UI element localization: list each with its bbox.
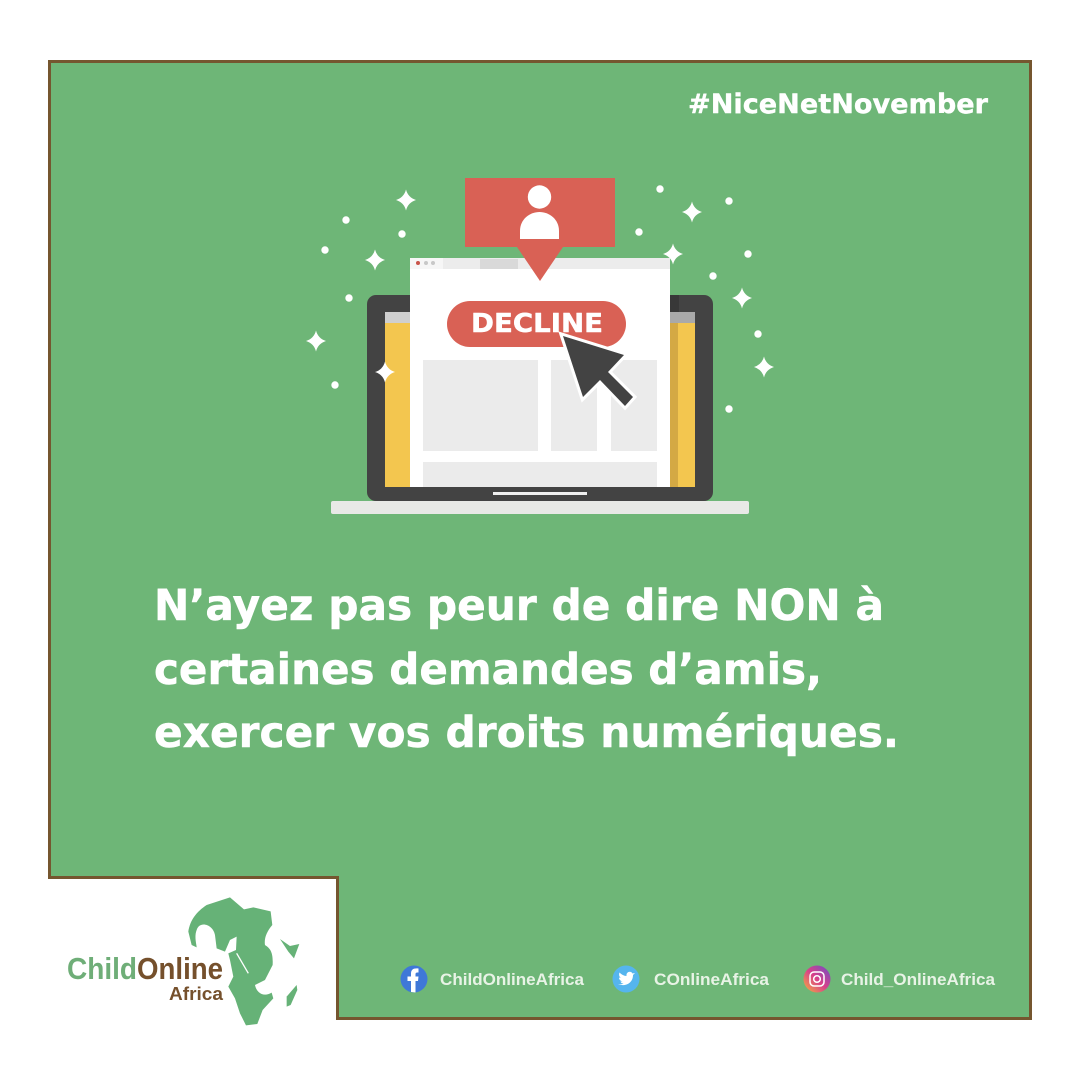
profile notification bubble	[465, 178, 615, 281]
logo: Child Online Africa: Africa	[169, 984, 224, 1004]
twitter handle: COnlineAfrica	[654, 970, 770, 989]
icon: Africa map	[188, 897, 299, 1025]
logo: Child Online Africa: Online	[137, 951, 223, 986]
main message	[154, 581, 899, 758]
browser window	[410, 258, 670, 487]
icon: instagram	[804, 966, 830, 992]
facebook handle: ChildOnlineAfrica	[440, 970, 585, 989]
illustration: laptop with decline popup	[306, 178, 774, 514]
logo: Child Online Africa	[67, 897, 299, 1025]
sparkles and dots	[306, 185, 774, 413]
instagram handle: Child_OnlineAfrica	[841, 970, 996, 989]
sparkles overlapping the screen	[375, 244, 683, 382]
laptop body	[331, 295, 749, 514]
icon: twitter	[612, 966, 640, 992]
main message: certaines demandes d’amis,	[154, 645, 822, 695]
icon: facebook	[400, 966, 428, 992]
wordmark: Child	[67, 951, 137, 986]
social links	[400, 966, 996, 992]
decline button	[447, 301, 626, 347]
main message: N’ayez pas peur de dire NON à	[154, 581, 884, 631]
icon: cursor arrow	[563, 336, 633, 406]
hashtag: #NiceNetNovember	[688, 89, 989, 120]
main message: exercer vos droits numériques.	[154, 708, 899, 758]
decline button: DECLINE	[471, 309, 603, 339]
